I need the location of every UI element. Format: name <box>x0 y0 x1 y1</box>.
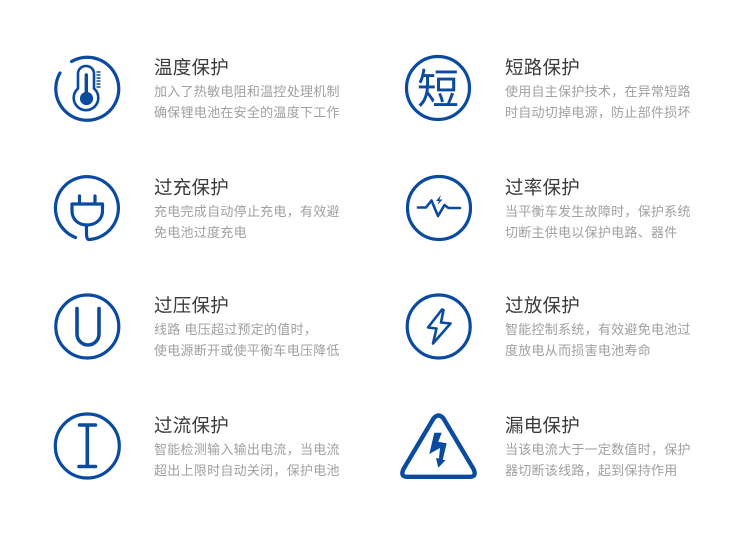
description: 智能控制系统，有效避免电池过 <box>505 322 691 337</box>
description: 智能检测输入输出电流，当电流 <box>154 442 340 457</box>
heading: 漏电保护 <box>505 415 580 436</box>
icon: short circuit character <box>404 54 472 122</box>
description: 超出上限时自动关闭，保护电池 <box>154 463 340 478</box>
description: 使用自主保护技术，在异常短路 <box>505 84 691 99</box>
panel: temperature protection <box>54 56 340 122</box>
description: 切断主供电以保护电路、器件 <box>505 225 678 240</box>
description: 当平衡车发生故障时，保护系统 <box>505 204 691 219</box>
heading: 温度保护 <box>154 57 229 78</box>
description <box>154 442 340 478</box>
description <box>505 442 691 478</box>
heading: 短路保护 <box>505 57 580 78</box>
heading: 过率保护 <box>505 177 580 198</box>
icon: letter I <box>54 412 121 480</box>
description: 器切断该线路，起到保持作用 <box>505 463 678 478</box>
icon: warning triangle <box>400 413 477 479</box>
heading: 过压保护 <box>154 295 229 316</box>
icon: plug <box>54 175 120 242</box>
description <box>505 322 691 358</box>
description: 充电完成自动停止充电，有效避 <box>154 204 340 219</box>
description: 使电源断开或使平衡车电压降低 <box>154 343 340 358</box>
heading: 过充保护 <box>154 177 229 198</box>
description: 度放电从而损害电池寿命 <box>505 343 651 358</box>
icon: letter U <box>54 293 120 360</box>
description: 当该电流大于一定数值时，保护 <box>505 442 691 457</box>
description <box>154 84 340 120</box>
panel: over-discharge protection <box>406 293 691 360</box>
description: 线路 电压超过预定的值时， <box>154 322 317 337</box>
panel: overcharge protection <box>54 175 340 242</box>
panel: over-rate protection <box>406 174 691 242</box>
icon: pulse line <box>406 174 472 242</box>
description: 免电池过度充电 <box>154 225 247 240</box>
panel: overvoltage protection <box>54 293 340 360</box>
icon: short circuit character: 短 <box>417 66 459 113</box>
description: 时自动切掉电源，防止部件损坏 <box>505 105 691 120</box>
icon: thermometer <box>54 56 120 122</box>
panel: leakage protection <box>400 413 691 479</box>
description <box>505 84 691 120</box>
icon: lightning bolt <box>406 293 472 360</box>
description: 确保锂电池在安全的温度下工作 <box>154 105 340 120</box>
description: 加入了热敏电阻和温控处理机制 <box>154 84 340 99</box>
description <box>154 322 340 358</box>
heading: 过放保护 <box>505 295 580 316</box>
description <box>505 204 691 240</box>
description <box>154 204 340 240</box>
panel: overcurrent protection <box>54 412 340 480</box>
panel: short circuit protection <box>404 54 691 122</box>
heading: 过流保护 <box>154 415 229 436</box>
